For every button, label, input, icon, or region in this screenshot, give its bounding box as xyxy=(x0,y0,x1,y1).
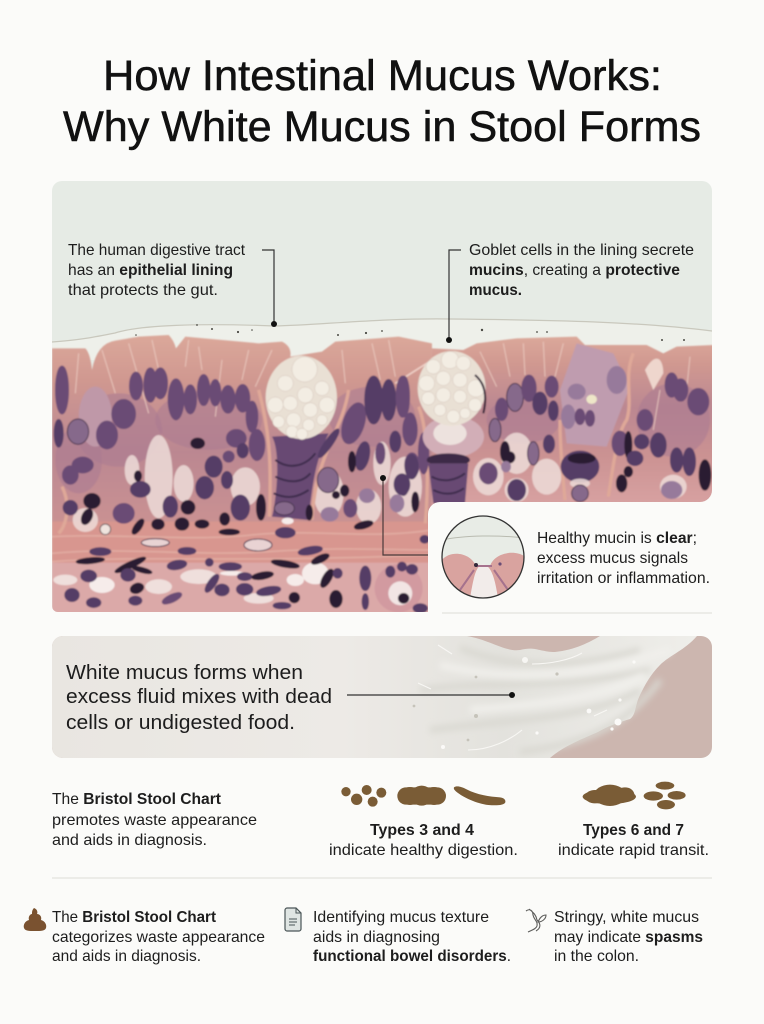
leader line: goblet cells xyxy=(446,250,461,343)
white mucus text: excess fluid mixes with dead xyxy=(66,686,332,708)
text: Bristol Stool Chart intro: premotes waste appearance xyxy=(52,812,257,829)
leader line: white mucus xyxy=(347,692,515,698)
infographic canvas xyxy=(24,58,712,964)
goblet cells callout text: mucus. xyxy=(469,282,522,299)
epithelial nuclei left xyxy=(55,367,312,536)
healthy mucin text xyxy=(537,530,710,587)
text: stringy mucus: may indicate spasms xyxy=(554,929,703,946)
epithelial lining callout text: The human digestive tract xyxy=(68,242,246,259)
white mucus text: White mucus forms when xyxy=(66,662,303,684)
text: stringy mucus: in the colon. xyxy=(554,948,639,965)
white mucus text: cells or undigested food. xyxy=(66,712,295,734)
goblet cells callout text: Goblet cells in the lining secrete xyxy=(469,242,694,259)
mucus photograph xyxy=(52,636,712,758)
text: stringy mucus xyxy=(554,909,703,965)
panel: white mucus xyxy=(52,636,712,758)
healthy mucin text: Healthy mucin is clear; xyxy=(537,530,697,547)
text: Bristol Stool Chart intro: and aids in diagnosis. xyxy=(52,832,207,849)
title: Why White Mucus in Stool Forms xyxy=(63,103,701,151)
healthy mucin text: irritation or inflammation. xyxy=(537,570,710,587)
epithelial lining callout text xyxy=(68,242,246,299)
healthy mucin text: excess mucus signals xyxy=(537,550,688,567)
text: mucus texture: aids in diagnosing xyxy=(313,929,440,946)
text: types 6 and 7 xyxy=(558,822,709,859)
epithelial lining callout text: that protects the gut. xyxy=(68,282,218,299)
white mucus text xyxy=(66,662,332,734)
connective tissue nuclei xyxy=(65,528,429,612)
text: Bristol Stool Chart summary: categorizes waste appearance xyxy=(52,929,265,946)
icon: stringy mucus xyxy=(526,909,546,932)
text: mucus texture xyxy=(313,909,511,965)
histology micrograph xyxy=(52,181,713,614)
goblet cell one xyxy=(266,356,337,524)
text: Bristol Stool Chart summary: and aids in diagnosis. xyxy=(52,948,201,965)
panel: histology of the epithelial lining xyxy=(52,181,713,614)
title xyxy=(63,52,701,151)
inset: healthy mucin magnifier xyxy=(442,516,524,598)
icon: stool xyxy=(24,908,46,931)
text: Bristol Stool Chart intro xyxy=(52,791,257,849)
icons: stool types 6 and 7 xyxy=(583,782,686,809)
icon: document xyxy=(285,908,301,931)
text: types 3 and 4 xyxy=(329,822,518,859)
epithelial nuclei far right xyxy=(398,367,711,512)
epithelial lining callout text: has an epithelial lining xyxy=(68,262,233,279)
epithelial nuclei right of goblet xyxy=(316,377,428,531)
text: types 6 and 7: Types 6 and 7 xyxy=(583,822,684,839)
text: stringy mucus: Stringy, white mucus xyxy=(554,909,699,926)
text: types 3 and 4: indicate healthy digestion. xyxy=(329,842,518,859)
text: types 3 and 4: Types 3 and 4 xyxy=(370,822,474,839)
title: How Intestinal Mucus Works: xyxy=(103,52,662,100)
text: Bristol Stool Chart summary xyxy=(52,909,265,965)
text: Bristol Stool Chart summary: The Bristol Stool Chart xyxy=(52,909,217,926)
goblet cells callout text xyxy=(469,242,694,299)
text: mucus texture: Identifying mucus texture xyxy=(313,909,489,926)
text: Bristol Stool Chart intro: The Bristol Stool Chart xyxy=(52,791,222,808)
goblet cells callout text: mucins, creating a protective xyxy=(469,262,680,279)
text: mucus texture: functional bowel disorders. xyxy=(313,948,511,965)
text: types 6 and 7: indicate rapid transit. xyxy=(558,842,709,859)
goblet cell two xyxy=(418,351,486,503)
icons: stool types 3 and 4 xyxy=(341,785,505,807)
leader line: epithelial lining xyxy=(262,250,277,327)
leader line: healthy mucin xyxy=(380,475,428,555)
